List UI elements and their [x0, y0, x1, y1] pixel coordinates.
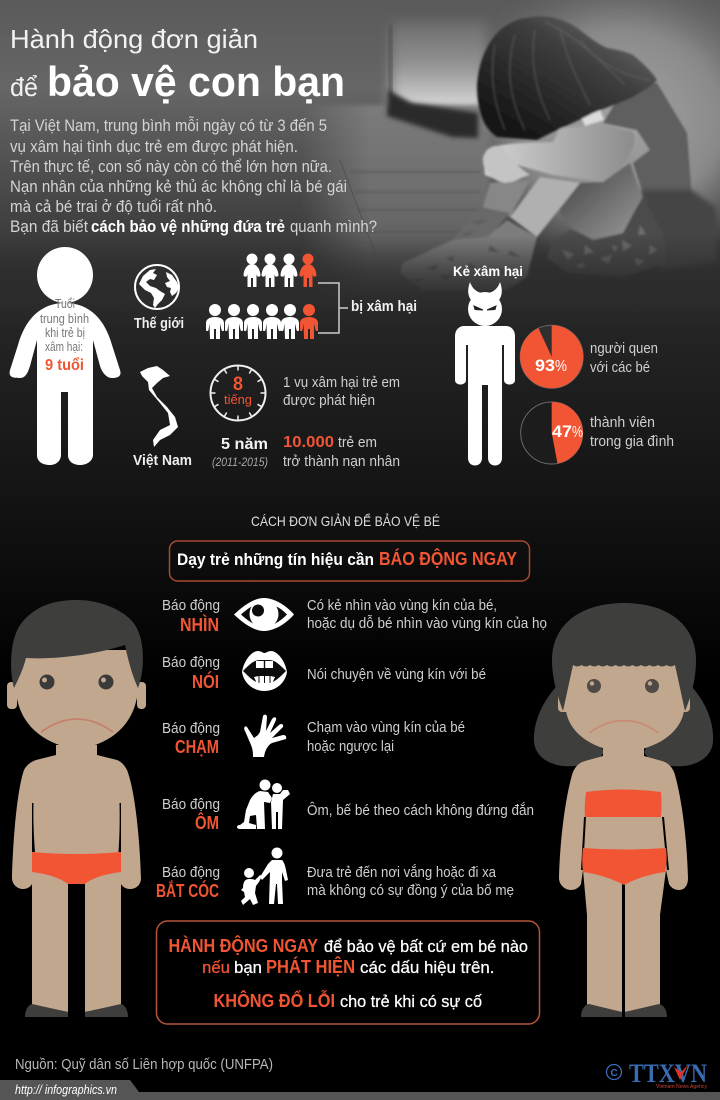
chart: pie 93 percent: 93	[535, 356, 555, 375]
label: touch: CHẠM	[175, 737, 219, 757]
panel: average victim age figure: trung bình	[40, 311, 89, 326]
illustration: sad girl	[534, 603, 713, 1017]
icon: hand	[244, 715, 286, 757]
label: look	[162, 597, 220, 635]
row: alarm kidnap	[156, 848, 514, 905]
description: touch: Chạm vào vùng kín của bé	[307, 719, 465, 736]
chart: pie 47 percent	[521, 402, 583, 464]
callout: teach alarm signals: Dạy trẻ những tín hiệu cần	[177, 550, 374, 569]
stat: 10.000 child victims: 10.000	[283, 434, 334, 451]
description: kidnap	[307, 864, 514, 899]
caption: acquaintances: người quen	[590, 340, 658, 357]
callout: act now: cho trẻ khi có sự cố	[340, 993, 482, 1011]
intro paragraph: Nạn nhân của những kẻ thủ ác không chỉ là bé gái	[10, 178, 347, 196]
section heading: CÁCH ĐƠN GIẢN ĐỂ BẢO VỆ BÉ	[251, 512, 440, 529]
intro paragraph: Bạn đã biết	[10, 218, 88, 236]
caption: acquaintances	[590, 340, 658, 376]
row: alarm talk	[162, 651, 486, 692]
title: để	[10, 72, 38, 102]
icon: globe	[135, 265, 179, 309]
description: talk: Nói chuyện về vùng kín với bé	[307, 666, 486, 683]
footer tab and url: http:// infographics.vn	[15, 1082, 117, 1097]
title	[10, 24, 345, 105]
stat: one case every 8 hours: được phát hiện	[283, 392, 375, 409]
description: hug: Ôm, bế bé theo cách không đứng đắn	[307, 802, 534, 819]
description: look: hoặc dụ dỗ bé nhìn vào vùng kín của họ	[307, 615, 547, 632]
stat: 10.000 child victims: trở thành nạn nhân	[283, 453, 400, 470]
intro paragraph	[10, 116, 377, 236]
intro paragraph: vụ xâm hại tình dục trẻ em được phát hiện.	[10, 138, 298, 156]
description: look: Có kẻ nhìn vào vùng kín của bé,	[307, 597, 497, 614]
caption: acquaintances: với các bé	[590, 359, 650, 376]
description: look	[307, 597, 547, 632]
title: Hành động đơn giản	[10, 24, 258, 54]
callout: act now: các dấu hiệu trên.	[360, 959, 494, 977]
chart: pie 93 percent	[520, 325, 583, 388]
stat: 5 years: (2011-2015)	[212, 457, 268, 469]
description: touch	[307, 719, 465, 755]
label: touch: Báo động	[162, 720, 220, 737]
chart: pie 93 percent: %	[555, 358, 567, 375]
panel: average victim age figure: 9 tuổi	[45, 356, 84, 374]
callout: teach alarm signals: BÁO ĐỘNG NGAY	[379, 548, 517, 569]
intro paragraph: quanh mình?	[290, 218, 377, 236]
label: Vietnam: Việt Nam	[133, 452, 192, 469]
caption: family members	[590, 414, 674, 450]
callout: act now: HÀNH ĐỘNG NGAY	[168, 935, 318, 956]
logo: TTXVN: TTXVN	[629, 1059, 707, 1088]
icon: devil abuser figure	[455, 282, 515, 466]
callout: act now: để bảo vệ bất cứ em bé nào	[324, 938, 528, 956]
pictogram: boys 1 in 6	[206, 304, 318, 339]
label: talk	[162, 654, 220, 692]
row: alarm touch	[162, 715, 465, 757]
icon: mouth	[242, 651, 287, 691]
panel: average victim age figure: khi trẻ bị	[45, 325, 85, 340]
chart: pie 47 percent: %	[572, 424, 583, 441]
label: look: NHÌN	[180, 614, 219, 635]
description: kidnap: mà không có sự đồng ý của bố mẹ	[307, 882, 514, 899]
callout: act now: nếu	[202, 959, 230, 977]
label: touch	[162, 720, 220, 757]
intro paragraph: Tại Việt Nam, trung bình mỗi ngày có từ 3 đến 5	[10, 116, 327, 135]
panel: average victim age figure	[10, 247, 121, 465]
intro paragraph: Trên thực tế, con số này còn có thể lớn hơn nữa.	[10, 158, 332, 176]
intro paragraph: mà cả bé trai ở độ tuổi rất nhỏ.	[10, 198, 217, 216]
footer tab and url	[0, 1080, 720, 1100]
icon: clock 8 hours: 8	[233, 374, 243, 395]
label: kidnap: Báo động	[162, 864, 220, 881]
stat: 5 years	[212, 436, 268, 469]
label: kidnap	[156, 864, 220, 901]
icon: clock 8 hours	[210, 366, 266, 420]
logo: TTXVN: C	[610, 1068, 618, 1079]
source note: Nguồn: Quỹ dân số Liên hợp quốc (UNFPA)	[15, 1056, 273, 1073]
icon: Vietnam map	[140, 366, 178, 447]
label: abuser: Kẻ xâm hại	[453, 263, 523, 279]
icon: adult leading child	[241, 848, 288, 905]
caption: family members: trong gia đình	[590, 433, 674, 450]
row: alarm hug	[162, 780, 534, 833]
label: kidnap: BẮT CÓC	[156, 880, 219, 901]
description: kidnap: Đưa trẻ đến nơi vắng hoặc đi xa	[307, 864, 497, 881]
stat: one case every 8 hours	[283, 374, 400, 409]
label: talk: NÓI	[192, 671, 219, 692]
callout: teach alarm signals	[170, 541, 530, 581]
stat: 10.000 child victims	[283, 434, 400, 470]
icon: eye	[234, 598, 294, 631]
callout: act now: bạn	[234, 959, 262, 977]
title: bảo vệ con bạn	[47, 58, 345, 105]
bracket with label	[318, 283, 417, 333]
row: alarm look	[162, 597, 547, 635]
callout: act now: KHÔNG ĐỔ LỖI	[214, 990, 335, 1011]
pictogram: girls 1 in 4	[244, 254, 316, 287]
description: touch: hoặc ngược lại	[307, 738, 394, 755]
label: hug: Báo động	[162, 796, 220, 813]
icon: adult hugging child	[237, 780, 290, 829]
intro paragraph: cách bảo vệ những đứa trẻ	[91, 218, 285, 236]
stat: 10.000 child victims: trẻ em	[338, 434, 377, 451]
stat: one case every 8 hours: 1 vụ xâm hại trẻ em	[283, 374, 400, 391]
caption: family members: thành viên	[590, 414, 655, 431]
photo: crying girl in hallway	[0, 0, 720, 300]
bracket with label: bị xâm hại	[351, 298, 417, 315]
illustration: sad boy	[7, 600, 146, 1017]
panel: average victim age figure: xâm hại:	[45, 339, 83, 354]
icon: clock 8 hours: tiếng	[224, 392, 252, 407]
label: hug	[162, 796, 220, 833]
stat: 5 years: 5 năm	[221, 436, 268, 453]
label: world: Thế giới	[134, 315, 184, 332]
logo: TTXVN	[606, 1059, 708, 1090]
label: look: Báo động	[162, 597, 220, 614]
panel: average victim age figure: Tuổi	[55, 296, 75, 311]
label: hug: ÔM	[195, 812, 219, 833]
chart: pie 47 percent: 47	[552, 422, 572, 441]
logo: TTXVN: Vietnam News Agency	[656, 1084, 708, 1090]
callout: act now: PHÁT HIỆN	[266, 956, 355, 977]
label: talk: Báo động	[162, 654, 220, 671]
callout: act now	[156, 921, 540, 1024]
